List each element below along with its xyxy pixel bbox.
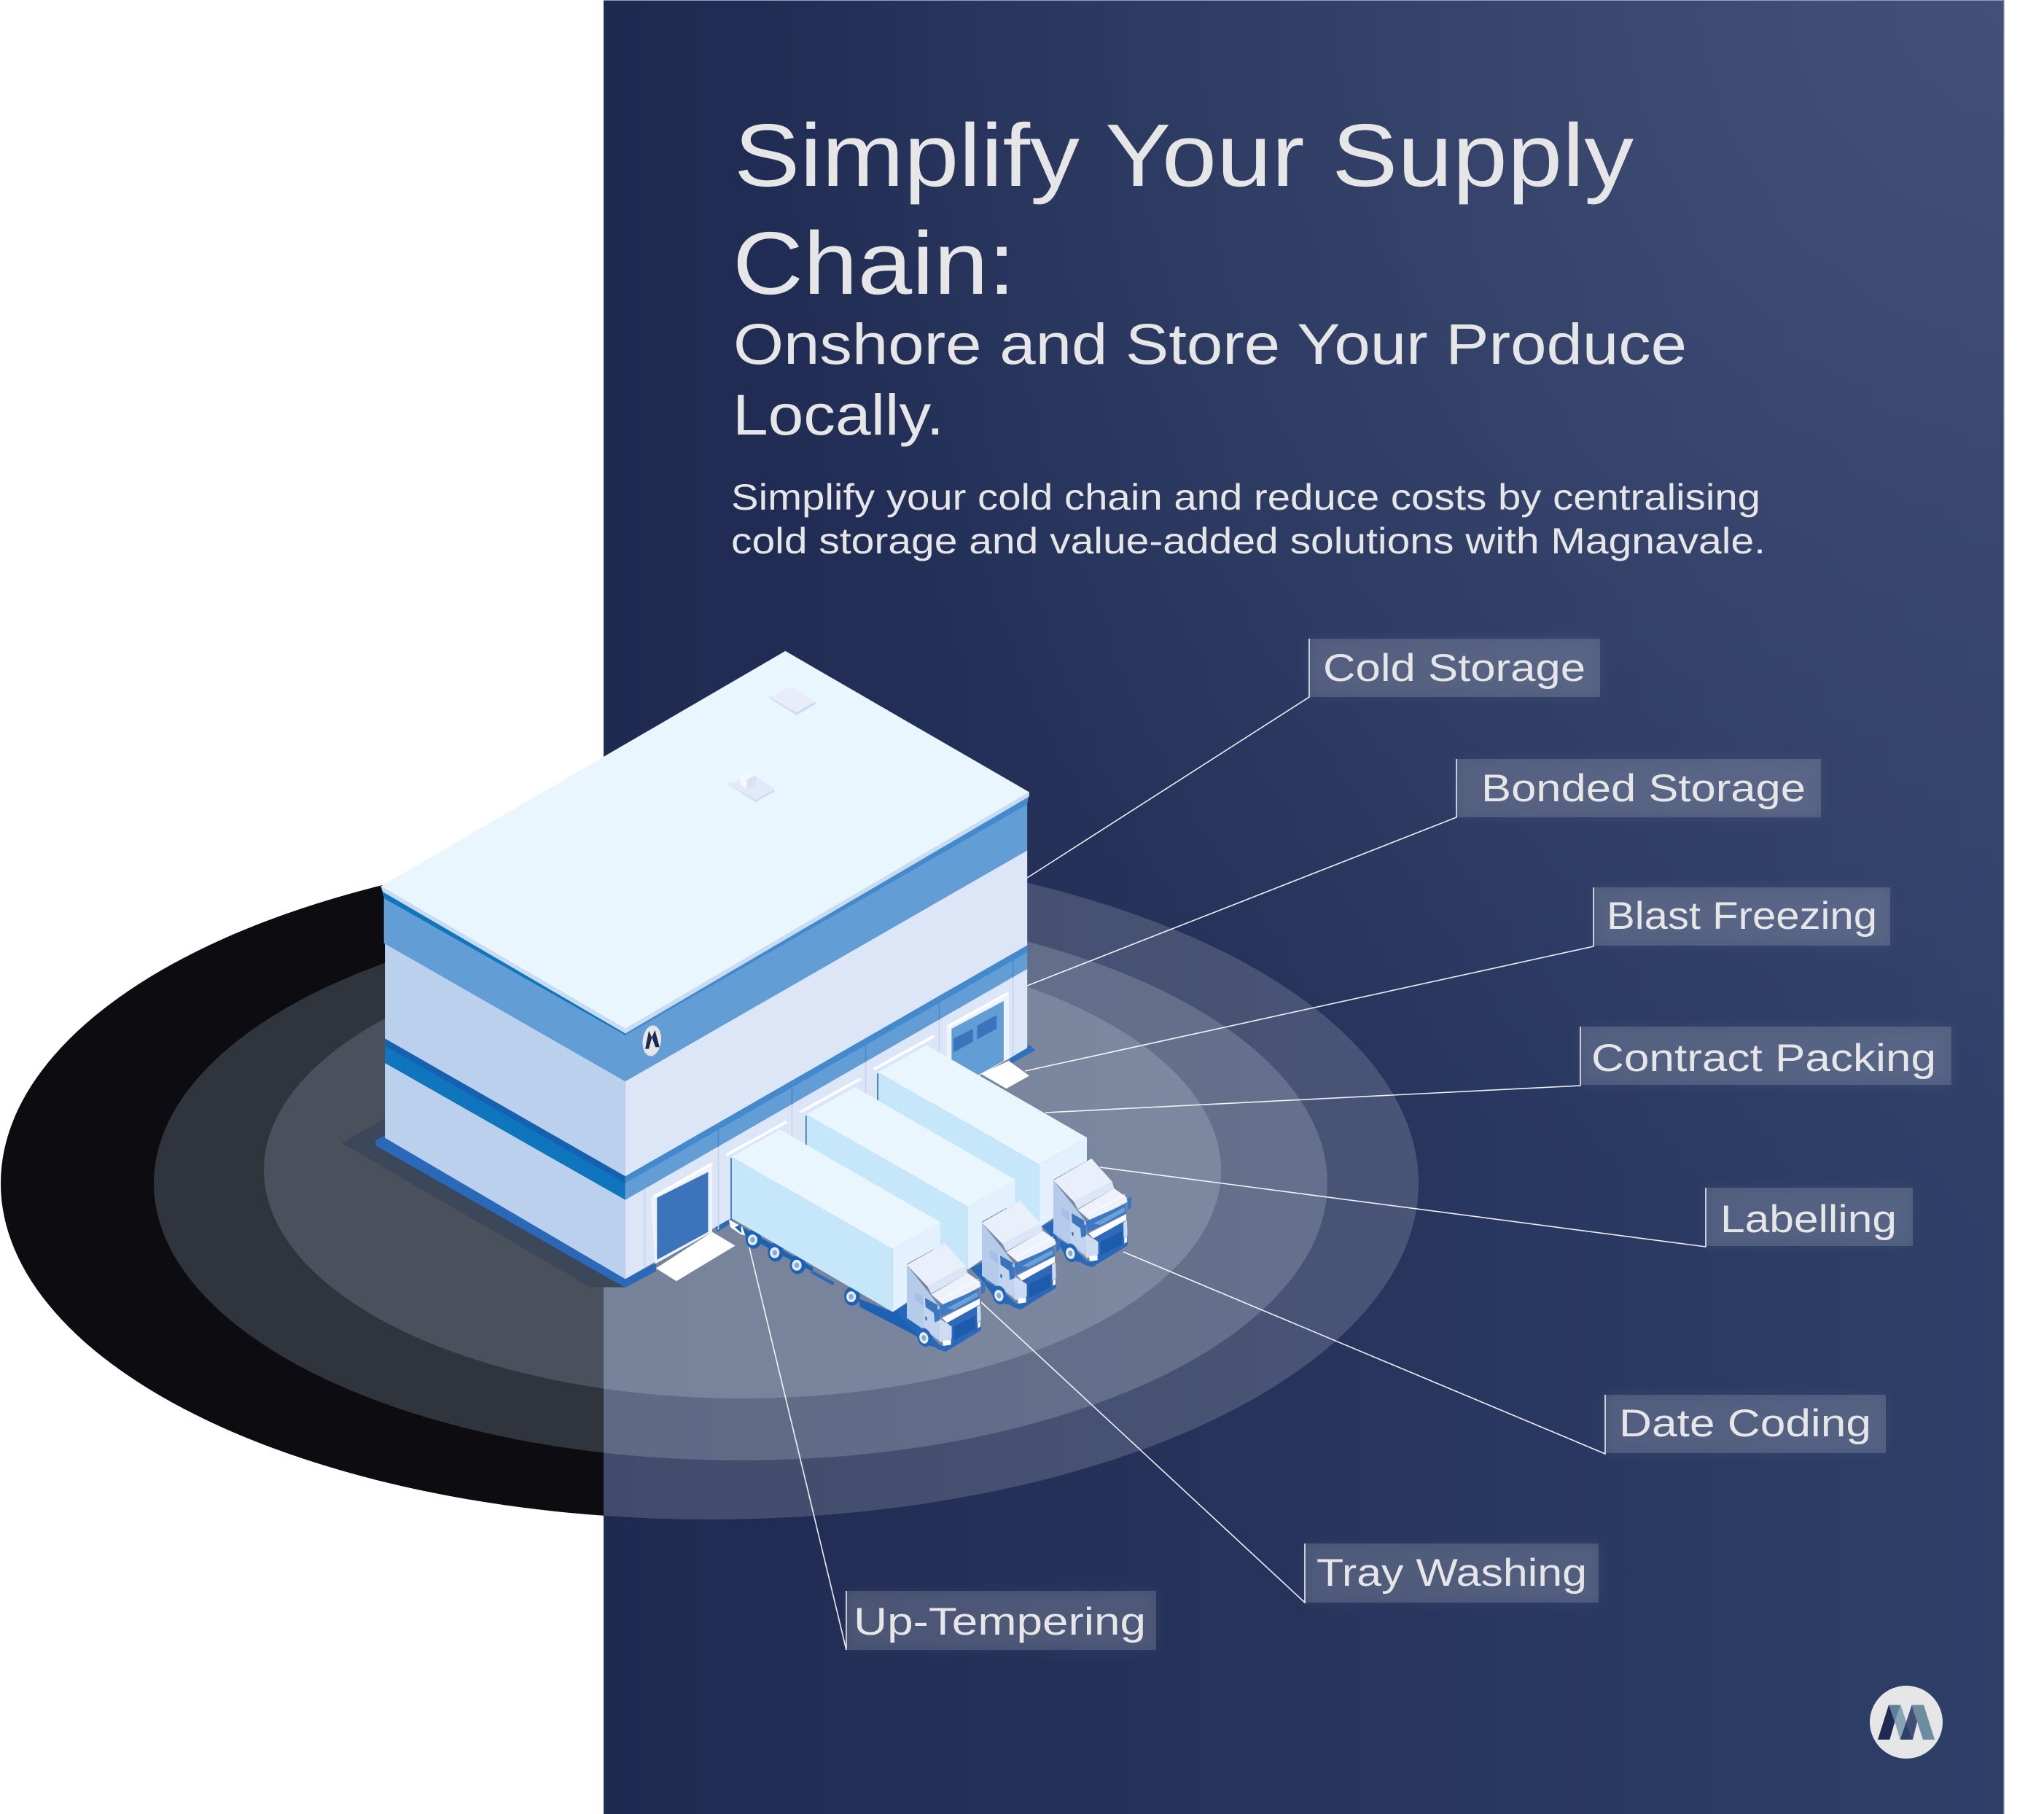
leader line: Up-Tempering <box>748 1242 846 1650</box>
label: Tray Washing: Tray Washing <box>1316 1552 1587 1595</box>
door 2 to 3 trims <box>727 1036 935 1155</box>
door 4 <box>946 992 1009 1078</box>
label: Up-Tempering: Up-Tempering <box>854 1600 1146 1643</box>
label: Date Coding <box>1606 1395 1886 1453</box>
roof <box>381 651 1029 1029</box>
panel: navy background <box>604 0 2005 1814</box>
intro paragraph <box>731 477 1766 561</box>
title <box>733 106 1634 313</box>
label: Contract Packing: Contract Packing <box>1591 1037 1936 1080</box>
leader line: Cold Storage <box>1027 639 1309 878</box>
ramp 4 <box>980 1061 1029 1089</box>
warehouse building <box>375 651 1035 1288</box>
ramp 1 <box>656 1232 736 1281</box>
title: Simplify Your Supply <box>734 106 1634 205</box>
leader line: Tray Washing <box>981 1302 1305 1603</box>
title: Chain: <box>733 214 1015 313</box>
pilasters <box>644 954 1013 1267</box>
ground rings: light side over panel <box>604 875 1419 1519</box>
roof hatch <box>770 687 816 715</box>
label: Bonded Storage <box>1457 759 1821 817</box>
ground rings: dark side over white <box>1 885 604 1516</box>
left wall lower <box>385 1063 625 1279</box>
intro paragraph: cold storage and value-added solutions with Magnavale. <box>731 521 1766 561</box>
intro paragraph: Simplify your cold chain and reduce costs by centralising <box>731 477 1760 518</box>
building ground shadow <box>342 1118 625 1287</box>
truck: middle <box>806 1087 1060 1309</box>
logo: Magnavale badge <box>1870 1686 1943 1759</box>
label: Labelling: Labelling <box>1720 1198 1897 1241</box>
label: Labelling <box>1706 1188 1913 1246</box>
leader line: Date Coding <box>1123 1252 1605 1454</box>
subtitle: Onshore and Store Your Produce <box>733 311 1687 376</box>
subtitle: Locally. <box>733 382 944 447</box>
roof edge <box>381 793 1029 1035</box>
leader line: Bonded Storage <box>1027 759 1456 986</box>
leader line: Blast Freezing <box>1025 887 1594 1071</box>
leader line: Labelling <box>1100 1167 1706 1247</box>
truck: front <box>729 1129 985 1352</box>
label: Blast Freezing: Blast Freezing <box>1607 895 1877 938</box>
front wall upper <box>625 850 1027 1176</box>
logo on fascia <box>641 1024 663 1056</box>
label: Contract Packing <box>1581 1027 1951 1085</box>
label: Cold Storage <box>1310 639 1600 697</box>
label: Tray Washing <box>1306 1544 1599 1603</box>
front blue stripe <box>625 946 1027 1200</box>
left fascia band <box>384 892 625 1081</box>
left wall upper <box>385 943 625 1176</box>
door 1 <box>651 1163 712 1264</box>
label: Date Coding: Date Coding <box>1619 1402 1871 1445</box>
roof vent <box>728 771 775 802</box>
front fascia band <box>625 799 1027 1081</box>
label: Blast Freezing <box>1594 887 1890 946</box>
leader line: Contract Packing <box>1045 1027 1580 1113</box>
front wall lower <box>625 969 1027 1279</box>
label: Bonded Storage: Bonded Storage <box>1481 767 1806 810</box>
left blue stripe <box>385 1038 625 1200</box>
label: Cold Storage: Cold Storage <box>1323 647 1585 690</box>
label: Up-Tempering <box>847 1591 1156 1650</box>
truck: rear <box>878 1045 1131 1267</box>
subtitle <box>733 311 1687 447</box>
